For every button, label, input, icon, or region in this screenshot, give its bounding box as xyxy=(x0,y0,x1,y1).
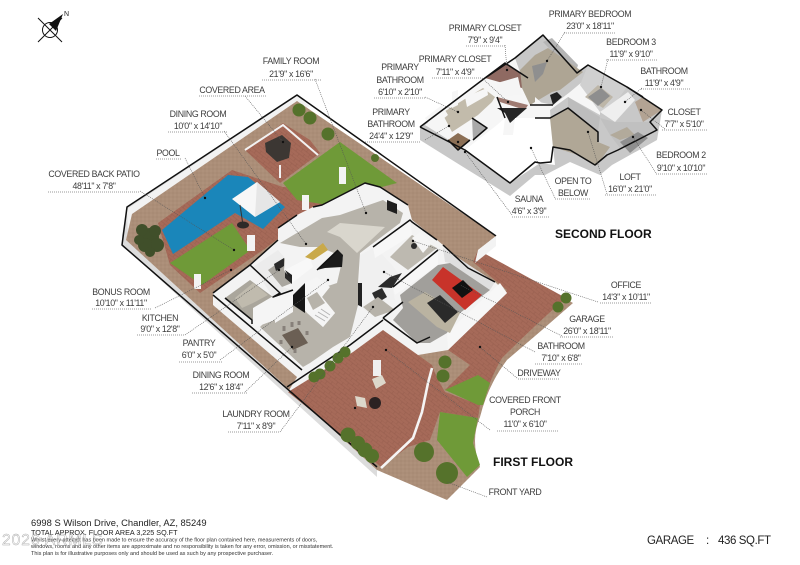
house wall lines xyxy=(213,183,495,370)
label: sauna: 4'6" x 3'9" xyxy=(512,206,547,216)
label: loft: LOFT xyxy=(619,172,642,182)
black stair xyxy=(550,92,562,105)
landscaping shrubs xyxy=(134,104,572,484)
label: pantry xyxy=(179,338,222,362)
label: covered area: COVERED AREA xyxy=(199,85,265,95)
primary bathroom floor xyxy=(442,88,495,132)
bathroom and laundry xyxy=(358,247,403,317)
heading: first floor: FIRST FLOOR xyxy=(493,455,573,469)
porch chairs xyxy=(355,360,386,409)
label: primary closet lower: 7'11" x 4'9" xyxy=(436,67,474,77)
label: dining room upper: DINING ROOM xyxy=(170,109,226,119)
wall at driveway xyxy=(475,236,496,263)
open to below xyxy=(465,118,555,183)
label: bedroom 3: BEDROOM 3 xyxy=(606,37,656,47)
label: dining room lower: DINING ROOM xyxy=(193,370,249,380)
primary bedroom wall xyxy=(543,38,578,75)
address block xyxy=(30,517,334,557)
label: bedroom 2 xyxy=(656,150,708,174)
label: primary bedroom xyxy=(549,9,631,33)
upstairs bathroom xyxy=(600,92,635,122)
front fence xyxy=(381,368,432,468)
first floor plan xyxy=(122,94,573,500)
label: laundry room: 7'11" x 8'9" xyxy=(237,421,275,431)
gray wall xyxy=(600,118,657,148)
label: primary bathroom upper: 6'10" x 2'10" xyxy=(378,87,422,97)
garage area summary: 436 SQ.FT xyxy=(718,535,771,547)
label: driveway: DRIVEWAY xyxy=(517,368,561,378)
exterior wall mass xyxy=(420,35,662,196)
silver car xyxy=(408,292,460,333)
label: primary bathroom lower: BATHROOM xyxy=(367,119,415,129)
label: kitchen xyxy=(137,313,185,335)
second floor plan xyxy=(420,35,662,196)
living and family room floor xyxy=(260,200,403,367)
front lawn upper xyxy=(445,375,490,405)
label: bathroom first floor: 7'10" x 6'8" xyxy=(541,353,581,363)
label: primary closet lower xyxy=(419,54,492,78)
kitchen xyxy=(253,243,328,297)
label: primary bathroom lower: PRIMARY xyxy=(372,107,410,117)
label: bedroom 3 xyxy=(606,37,657,60)
lot inner wall strip xyxy=(127,96,310,240)
label: covered front porch: 11'0" x 6'10" xyxy=(503,419,547,429)
label: open to below xyxy=(555,176,592,199)
label: garage: GARAGE xyxy=(569,314,605,324)
garage area summary xyxy=(647,535,771,547)
label: pool: POOL xyxy=(156,148,180,158)
icon: north compass xyxy=(38,11,69,42)
label: open to below: OPEN TO xyxy=(555,176,592,186)
family room sofa xyxy=(327,223,385,253)
label: primary bedroom: PRIMARY BEDROOM xyxy=(549,9,631,19)
lot wall lines xyxy=(122,95,496,467)
heading: second floor: SECOND FLOOR xyxy=(555,227,652,241)
lower left wall face shadow xyxy=(293,283,305,313)
white doors wall xyxy=(535,97,550,120)
label: kitchen: 9'0" x 12'8" xyxy=(140,324,180,334)
label: covered front porch xyxy=(489,395,562,431)
patio umbrella xyxy=(232,182,280,228)
front porch brick xyxy=(288,330,480,467)
label: garage xyxy=(560,314,613,337)
label: primary bathroom lower xyxy=(365,107,420,142)
icon: north compass: N xyxy=(64,11,69,18)
loft floor xyxy=(550,108,610,165)
office xyxy=(373,220,437,270)
label: primary closet upper: 7'9" x 9'4" xyxy=(468,35,503,45)
label: dining room lower xyxy=(192,370,249,393)
address block: TOTAL APPROX. FLOOR AREA 3,225 SQ.FT xyxy=(31,528,178,537)
label: bedroom 3: 11'9" x 9'10" xyxy=(609,49,653,59)
second floor wall lines xyxy=(420,35,662,183)
label: covered back patio: COVERED BACK PATIO xyxy=(48,169,140,179)
primary closets xyxy=(485,63,528,110)
gravel lot ground xyxy=(126,101,573,500)
label: loft: 16'0" x 21'0" xyxy=(608,184,652,194)
label: pantry: PANTRY xyxy=(183,338,216,348)
brown floor xyxy=(448,133,470,150)
label: primary bathroom upper: BATHROOM xyxy=(376,75,424,85)
label: primary bathroom lower: 24'4" x 12'9" xyxy=(369,131,413,141)
label: sauna: SAUNA xyxy=(515,194,544,204)
label: laundry room xyxy=(222,409,290,432)
label: primary bathroom upper xyxy=(374,62,425,98)
label: office xyxy=(600,280,651,303)
white interior base xyxy=(425,58,600,183)
label: dining room upper xyxy=(168,109,228,132)
label: sauna xyxy=(512,194,549,217)
label: covered front porch: PORCH xyxy=(510,407,540,417)
label: bonus room: BONUS ROOM xyxy=(92,287,150,297)
lot side wall xyxy=(122,94,377,477)
label: front yard: FRONT YARD xyxy=(489,487,541,497)
label: primary bedroom: 23'0" x 18'11" xyxy=(566,21,614,31)
label: closet: 7'7" x 5'10" xyxy=(664,119,704,129)
tv xyxy=(387,200,397,214)
label: bonus room xyxy=(92,287,152,309)
closet xyxy=(635,97,662,122)
pool xyxy=(162,175,285,254)
primary bedroom bed xyxy=(532,62,547,82)
label: primary bathroom upper: PRIMARY xyxy=(381,62,419,72)
label: bathroom first floor xyxy=(535,341,585,364)
house white base xyxy=(213,183,507,392)
label: garage: 26'0" x 18'11" xyxy=(563,326,611,336)
label: primary closet upper xyxy=(449,23,522,46)
label: closet xyxy=(662,107,707,130)
toilet room xyxy=(472,118,487,140)
label: closet: CLOSET xyxy=(667,107,702,117)
lawn at back xyxy=(283,142,397,205)
address block: windows, rooms and any other items are approximate and no responsibility is taken for any error, omission, or misstatement. xyxy=(30,544,334,550)
front lawn lower xyxy=(437,412,480,477)
label: laundry room: LAUNDRY ROOM xyxy=(222,409,290,419)
garage area summary: : xyxy=(706,535,709,547)
label: office: OFFICE xyxy=(611,280,642,290)
label: family room: 21'9" x 16'6" xyxy=(269,69,313,79)
label: bathroom second floor: 11'9" x 4'9" xyxy=(645,78,683,88)
label: pantry: 6'0" x 5'0" xyxy=(182,350,217,360)
driveway brick xyxy=(445,250,566,402)
bonus room xyxy=(225,280,293,328)
label: bedroom 2: BEDROOM 2 xyxy=(656,150,706,160)
primary bathroom fixtures xyxy=(425,88,488,128)
label: bathroom first floor: BATHROOM xyxy=(537,341,585,351)
back patio brick xyxy=(158,170,353,293)
label: kitchen: KITCHEN xyxy=(142,313,178,323)
red car xyxy=(432,267,482,310)
watermark: 2026 ARMLS xyxy=(2,532,103,549)
dining table xyxy=(281,321,308,353)
porch wall line xyxy=(287,320,383,387)
leader lines and room markers xyxy=(140,32,665,497)
label: primary closet upper: PRIMARY CLOSET xyxy=(449,23,522,33)
label: bathroom second floor xyxy=(640,66,690,89)
address block: This plan is for illustrative purposes only and should be used as such by any prospective purchaser. xyxy=(31,551,274,557)
label: bonus room: 10'10" x 11'11" xyxy=(95,298,147,308)
covered area with seating xyxy=(245,123,320,183)
label: office: 14'3" x 10'11" xyxy=(602,292,650,302)
primary bedroom floor xyxy=(520,48,583,105)
dark stair landing xyxy=(497,108,527,123)
label: family room: FAMILY ROOM xyxy=(263,56,319,66)
label: covered back patio xyxy=(48,169,140,192)
address block: 6998 S Wilson Drive, Chandler, AZ, 85249 xyxy=(31,517,207,528)
label: dining room lower: 12'6" x 18'4" xyxy=(199,382,243,392)
label: covered back patio: 48'11" x 7'8" xyxy=(72,181,116,191)
garage area summary: GARAGE xyxy=(647,535,695,547)
label: bedroom 2: 9'10" x 10'10" xyxy=(657,163,705,173)
label: family room xyxy=(262,56,322,80)
bedroom 2 xyxy=(610,127,648,153)
label: covered front porch: COVERED FRONT xyxy=(489,395,562,405)
label: open to below: BELOW xyxy=(558,188,589,198)
garage xyxy=(393,248,507,350)
lawn by pool xyxy=(170,223,248,285)
staircase xyxy=(305,250,343,327)
label: dining room upper: 10'0" x 14'10" xyxy=(174,121,222,131)
label: primary closet lower: PRIMARY CLOSET xyxy=(419,54,492,64)
label: bathroom second floor: BATHROOM xyxy=(640,66,688,76)
address block: Whilst every attempt has been made to ensure the accuracy of the floor plan contained here, measurements of doors, xyxy=(31,538,318,544)
gray wall by loft xyxy=(568,97,600,132)
label: loft xyxy=(605,172,656,195)
bedroom 3 xyxy=(580,65,627,112)
white pillars xyxy=(194,167,346,289)
